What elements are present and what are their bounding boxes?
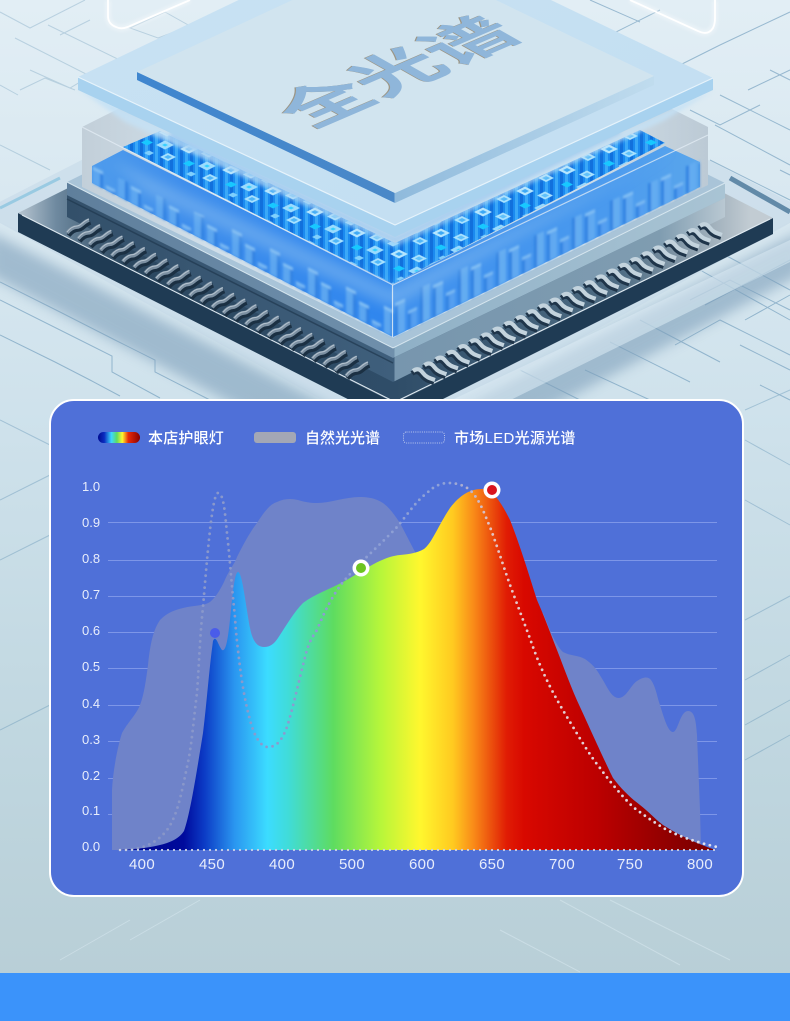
dark block — [67, 195, 725, 382]
glass box walls — [82, 0, 708, 338]
market LED dotted curve — [120, 483, 717, 850]
y axis labels: 0.7 — [82, 587, 100, 602]
x axis labels: 750 — [617, 856, 643, 873]
y axis labels: 0.0 — [82, 839, 100, 854]
x axis labels: 500 — [339, 856, 365, 873]
bottom bar — [0, 973, 790, 1021]
y axis labels: 0.5 — [82, 659, 100, 674]
front blue layer — [92, 146, 700, 337]
natural light area — [112, 497, 701, 850]
glass underside reflection — [78, 88, 713, 247]
y axis labels: 0.6 — [82, 623, 100, 638]
chip title: 全光谱 — [259, 8, 538, 136]
y axis labels — [82, 479, 100, 854]
y axis labels: 0.3 — [82, 732, 100, 747]
bright back circuit layer — [123, 130, 665, 284]
pins row right — [412, 224, 722, 382]
legend: this lamp: 本店护眼灯 — [148, 430, 224, 447]
panel: spectrum chart — [50, 400, 743, 896]
legend: this lamp — [98, 430, 224, 447]
x axis labels — [129, 856, 713, 873]
pins row left — [67, 219, 370, 378]
marker: red point — [484, 482, 500, 498]
chip top — [137, 0, 654, 203]
marker: blue point — [210, 628, 220, 638]
icon: glowing frame right — [630, 0, 715, 33]
x axis labels: 600 — [409, 856, 435, 873]
substrate lid — [67, 20, 725, 363]
glass plate — [78, 0, 713, 237]
icon: glowing frame left — [108, 0, 190, 28]
marker: green point — [352, 560, 370, 576]
chip illustration — [18, 0, 773, 423]
legend: market LED — [404, 429, 576, 447]
y axis labels: 0.8 — [82, 551, 100, 566]
y axis labels: 0.9 — [82, 515, 100, 530]
x axis labels: 450 — [199, 856, 225, 873]
x axis labels: 400 — [129, 856, 155, 873]
legend: market LED: 市场LED光源光谱 — [454, 429, 576, 447]
x axis labels: 650 — [479, 856, 505, 873]
glass box front edges — [82, 127, 708, 337]
chip title: 全光谱 — [258, 8, 537, 137]
legend — [98, 429, 576, 447]
dark base — [18, 25, 773, 423]
y axis labels: 1.0 — [82, 479, 100, 494]
y axis labels: 0.2 — [82, 768, 100, 783]
panel background — [50, 400, 743, 896]
ground plate under chip — [0, 0, 790, 490]
x axis labels: 700 — [549, 856, 575, 873]
legend: natural light — [254, 429, 380, 447]
lamp spectrum area — [118, 489, 716, 850]
x axis labels: 400 — [269, 856, 295, 873]
legend: natural light: 自然光光谱 — [305, 429, 380, 447]
y axis labels: 0.1 — [82, 803, 100, 818]
x axis labels: 800 — [687, 856, 713, 873]
grid lines — [108, 522, 717, 814]
y axis labels: 0.4 — [82, 696, 100, 711]
